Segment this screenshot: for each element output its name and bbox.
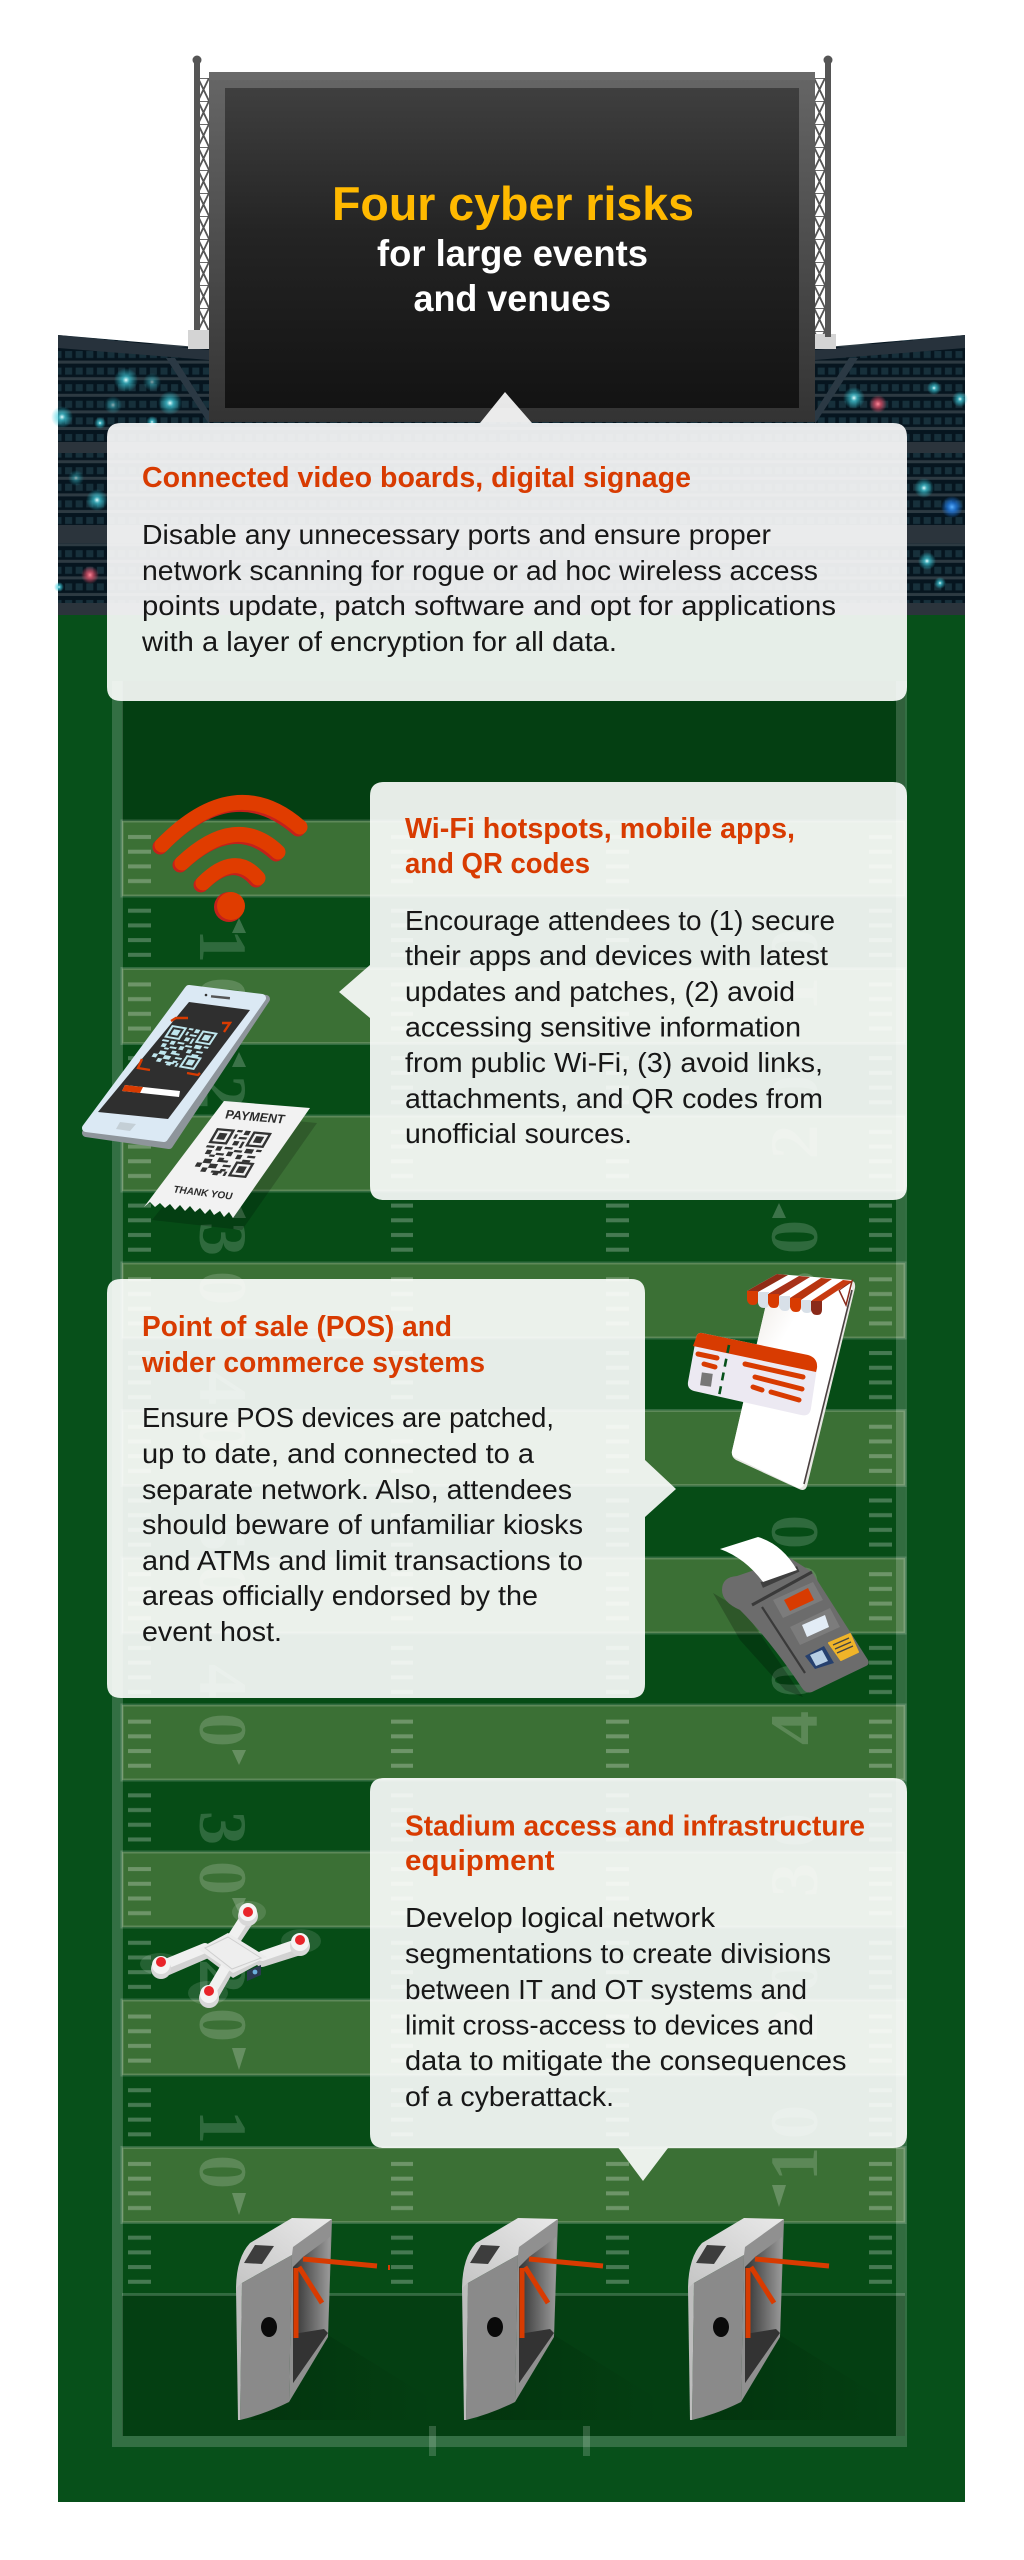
icon: payment receipt bbox=[144, 1101, 317, 1230]
yard numbers left: 3 bbox=[185, 1222, 261, 1256]
body: wi-fi: from public Wi-Fi, (3) avoid links, bbox=[405, 1047, 823, 1078]
stand lights right bbox=[843, 381, 968, 589]
yard numbers right: 0 bbox=[756, 1515, 832, 1549]
body: video boards: points update, patch software and opt for applications bbox=[142, 590, 836, 621]
body: stadium access: segmentations to create divisions bbox=[405, 1938, 831, 1969]
icon: phone with QR code bbox=[86, 989, 266, 1145]
yard numbers right: 1 bbox=[756, 977, 832, 1011]
stand lights left bbox=[51, 368, 182, 592]
yard numbers left: 0 bbox=[185, 977, 261, 1011]
yard numbers left: 2 bbox=[185, 1075, 261, 1109]
body: wi-fi: attachments, and QR codes from bbox=[405, 1083, 823, 1114]
body: wi-fi bbox=[405, 905, 835, 1149]
stadium stands bbox=[51, 335, 968, 615]
body: stadium access bbox=[405, 1902, 846, 2112]
yard numbers right: 0 bbox=[756, 1075, 832, 1109]
yard numbers right: 2 bbox=[756, 1125, 832, 1159]
yard numbers left: 1 bbox=[185, 929, 261, 963]
heading: wi-fi bbox=[405, 813, 795, 880]
yard numbers right bbox=[756, 929, 832, 2207]
heading: wi-fi: Wi-Fi hotspots, mobile apps, bbox=[405, 813, 795, 845]
body: point of sale bbox=[142, 1402, 583, 1647]
yard numbers left: 0 bbox=[185, 1713, 261, 1747]
icon: wi-fi bbox=[160, 802, 300, 922]
heading: point of sale bbox=[141, 1311, 485, 1379]
heading: video boards: Connected video boards, digital signage bbox=[142, 462, 691, 494]
yard numbers left: 1 bbox=[185, 2110, 261, 2144]
body: wi-fi: updates and patches, (2) avoid bbox=[405, 976, 795, 1007]
yard numbers right: 4 bbox=[756, 1711, 832, 1745]
title: and venues bbox=[414, 278, 611, 319]
left truss mast bbox=[188, 56, 210, 349]
body: video boards: with a layer of encryption for all data. bbox=[141, 626, 617, 657]
yard numbers right: 0 bbox=[756, 1959, 832, 1993]
yard numbers left: 4 bbox=[185, 1664, 261, 1698]
yard numbers left: 0 bbox=[185, 1123, 261, 1157]
yard numbers left: 0 bbox=[185, 1861, 261, 1895]
yard numbers left: 0 bbox=[185, 2155, 261, 2189]
body: stadium access: limit cross-access to devices and bbox=[405, 2010, 814, 2040]
icon: mobile storefront with ticket bbox=[688, 1274, 855, 1490]
yard numbers right: 3 bbox=[756, 1863, 832, 1897]
yard numbers right: 0 bbox=[756, 1220, 832, 1254]
yard numbers left bbox=[185, 918, 261, 2215]
icon: payment receipt: PAYMENT bbox=[225, 1107, 286, 1127]
awning bbox=[747, 1274, 852, 1315]
yard numbers right: 1 bbox=[756, 2147, 832, 2181]
yard numbers left: 0 bbox=[185, 2008, 261, 2042]
icon: drone bbox=[140, 1901, 321, 2008]
body: point of sale: separate network. Also, attendees bbox=[142, 1474, 572, 1505]
yard numbers left: 0 bbox=[185, 1565, 261, 1599]
icon: card payment terminal bbox=[713, 1537, 869, 1697]
icon: turnstile 1 bbox=[236, 2218, 433, 2420]
heading: point of sale: Point of sale (POS) and bbox=[142, 1311, 452, 1343]
yard numbers left: 0 bbox=[185, 1271, 261, 1305]
yard numbers left: 3 bbox=[185, 1811, 261, 1845]
body: point of sale: up to date, and connected to a bbox=[142, 1438, 535, 1469]
icon: turnstile 3 bbox=[688, 2218, 885, 2420]
body: point of sale: Ensure POS devices are patched, bbox=[142, 1402, 554, 1433]
body: video boards: Disable any unnecessary ports and ensure proper bbox=[142, 519, 771, 550]
ticket bbox=[688, 1333, 817, 1415]
panel: connected video boards bbox=[107, 392, 907, 701]
body: point of sale: and ATMs and limit transactions to bbox=[142, 1545, 583, 1576]
right truss mast bbox=[815, 56, 836, 349]
title bbox=[332, 177, 694, 319]
panel: wi-fi hotspots bbox=[339, 782, 907, 1200]
body: point of sale: areas officially endorsed by the bbox=[142, 1580, 538, 1611]
yard numbers left: 2 bbox=[185, 1959, 261, 1993]
yard numbers left: 4 bbox=[185, 1371, 261, 1405]
body: stadium access: between IT and OT systems and bbox=[405, 1974, 807, 2005]
panel: point of sale bbox=[107, 1279, 676, 1698]
football field bbox=[58, 615, 965, 2502]
heading: stadium access: Stadium access and infrastructure bbox=[405, 1810, 865, 1842]
heading: point of sale: wider commerce systems bbox=[141, 1347, 485, 1379]
body: wi-fi: Encourage attendees to (1) secure bbox=[405, 905, 835, 936]
body: point of sale: should beware of unfamiliar kiosks bbox=[142, 1509, 583, 1540]
icon: payment receipt: THANK YOU bbox=[173, 1184, 234, 1203]
panel: stadium access bbox=[370, 1778, 907, 2181]
video board bbox=[209, 72, 815, 422]
body: stadium access: Develop logical network bbox=[405, 1902, 715, 1933]
body: wi-fi: accessing sensitive information bbox=[405, 1012, 801, 1042]
body: wi-fi: unofficial sources. bbox=[405, 1118, 632, 1149]
yard numbers right: 0 bbox=[756, 929, 832, 963]
yard numbers left: 5 bbox=[185, 1517, 261, 1551]
body: stadium access: data to mitigate the consequences bbox=[405, 2045, 846, 2076]
yard numbers right: 0 bbox=[756, 1371, 832, 1405]
yard numbers right: 4 bbox=[756, 1419, 832, 1453]
yard numbers right: 3 bbox=[756, 1271, 832, 1305]
heading: wi-fi: and QR codes bbox=[405, 848, 590, 880]
yard numbers right: 0 bbox=[756, 1813, 832, 1847]
body: stadium access: of a cyberattack. bbox=[405, 2081, 614, 2112]
heading: stadium access bbox=[405, 1810, 865, 1877]
title: for large events bbox=[377, 233, 648, 274]
icon: turnstile 2 bbox=[462, 2218, 659, 2420]
body: video boards: network scanning for rogue or ad hoc wireless access bbox=[142, 555, 818, 586]
body: wi-fi: their apps and devices with latest bbox=[405, 940, 828, 971]
body: video boards bbox=[141, 519, 836, 657]
yard numbers left: 0 bbox=[185, 1419, 261, 1453]
yard numbers right: 5 bbox=[756, 1565, 832, 1599]
yard numbers right: 0 bbox=[756, 1663, 832, 1697]
yard numbers right: 0 bbox=[756, 2105, 832, 2139]
title: Four cyber risks bbox=[332, 177, 694, 230]
yard numbers right: 2 bbox=[756, 2008, 832, 2042]
body: point of sale: event host. bbox=[142, 1616, 282, 1647]
heading: stadium access: equipment bbox=[405, 1845, 555, 1877]
